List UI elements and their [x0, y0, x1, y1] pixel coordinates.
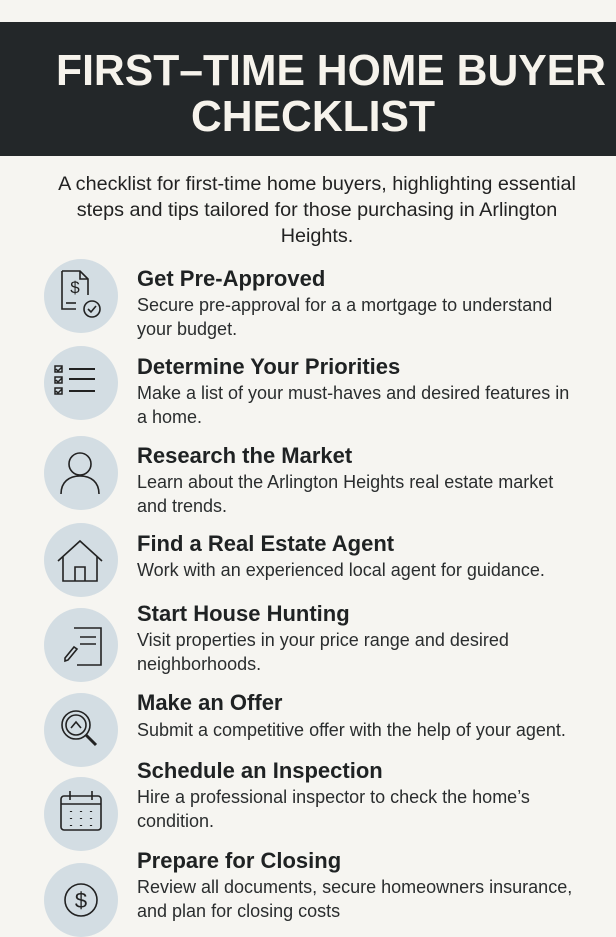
- item: inspection: condition.: [137, 810, 214, 830]
- item: research: Learn about the Arlington Heights real estate market: [137, 472, 553, 492]
- item: inspection: Schedule an Inspection: [137, 758, 383, 783]
- icon: magnifier: [44, 693, 118, 767]
- item: house hunting: Visit properties in your price range and desired: [137, 630, 509, 650]
- item: house hunting: neighborhoods.: [137, 654, 261, 674]
- item: make an offer: Submit a competitive offer with the help of your agent.: [137, 720, 566, 740]
- item: closing: Review all documents, secure homeowners insurance,: [137, 877, 572, 897]
- item: inspection: Hire a professional inspector to check the home’s: [137, 787, 530, 807]
- item: get pre-approved: Secure pre-approval for a a mortgage to understand: [137, 295, 552, 315]
- icon: document with dollar: [44, 259, 118, 333]
- item: closing: [44, 848, 572, 937]
- item: house hunting: [44, 601, 509, 682]
- item: agent: Work with an experienced local agent for guidance.: [137, 560, 545, 580]
- item: research: [44, 436, 554, 516]
- title banner: CHECKLIST: [191, 92, 435, 141]
- item: priorities: [44, 346, 569, 426]
- icon: checklist: [44, 346, 118, 420]
- subtitle: [58, 173, 576, 247]
- icon: document with dollar: $: [70, 278, 80, 297]
- item: agent: Find a Real Estate Agent: [137, 531, 394, 556]
- item: get pre-approved: [44, 259, 552, 339]
- title banner: [0, 22, 616, 156]
- item: priorities: Make a list of your must-haves and desired features in: [137, 383, 569, 403]
- item: research: Research the Market: [137, 443, 352, 468]
- icon: calendar: [44, 777, 118, 851]
- item: house hunting: Start House Hunting: [137, 601, 350, 626]
- item: closing: and plan for closing costs: [137, 900, 340, 920]
- subtitle: steps and tips tailored for those purchasing in Arlington: [77, 199, 557, 221]
- item: make an offer: Make an Offer: [137, 690, 282, 715]
- item: closing: Prepare for Closing: [137, 848, 341, 873]
- subtitle: Heights.: [281, 225, 353, 247]
- item: priorities: a home.: [137, 406, 202, 426]
- item: research: and trends.: [137, 496, 227, 516]
- item: get pre-approved: your budget.: [137, 318, 237, 338]
- item: agent: [44, 523, 545, 597]
- icon: dollar coin: [44, 863, 118, 937]
- subtitle: A checklist for first-time home buyers, highlighting essential: [58, 173, 576, 195]
- title banner: FIRST–TIME HOME BUYER: [56, 46, 606, 95]
- item: inspection: [44, 758, 530, 851]
- icon: house: [44, 523, 118, 597]
- icon: notepad with pencil: [44, 608, 118, 682]
- item: priorities: Determine Your Priorities: [137, 354, 400, 379]
- item: get pre-approved: Get Pre-Approved: [137, 266, 325, 291]
- icon: person: [44, 436, 118, 510]
- icon: dollar coin: $: [75, 888, 87, 913]
- item: make an offer: [44, 690, 566, 767]
